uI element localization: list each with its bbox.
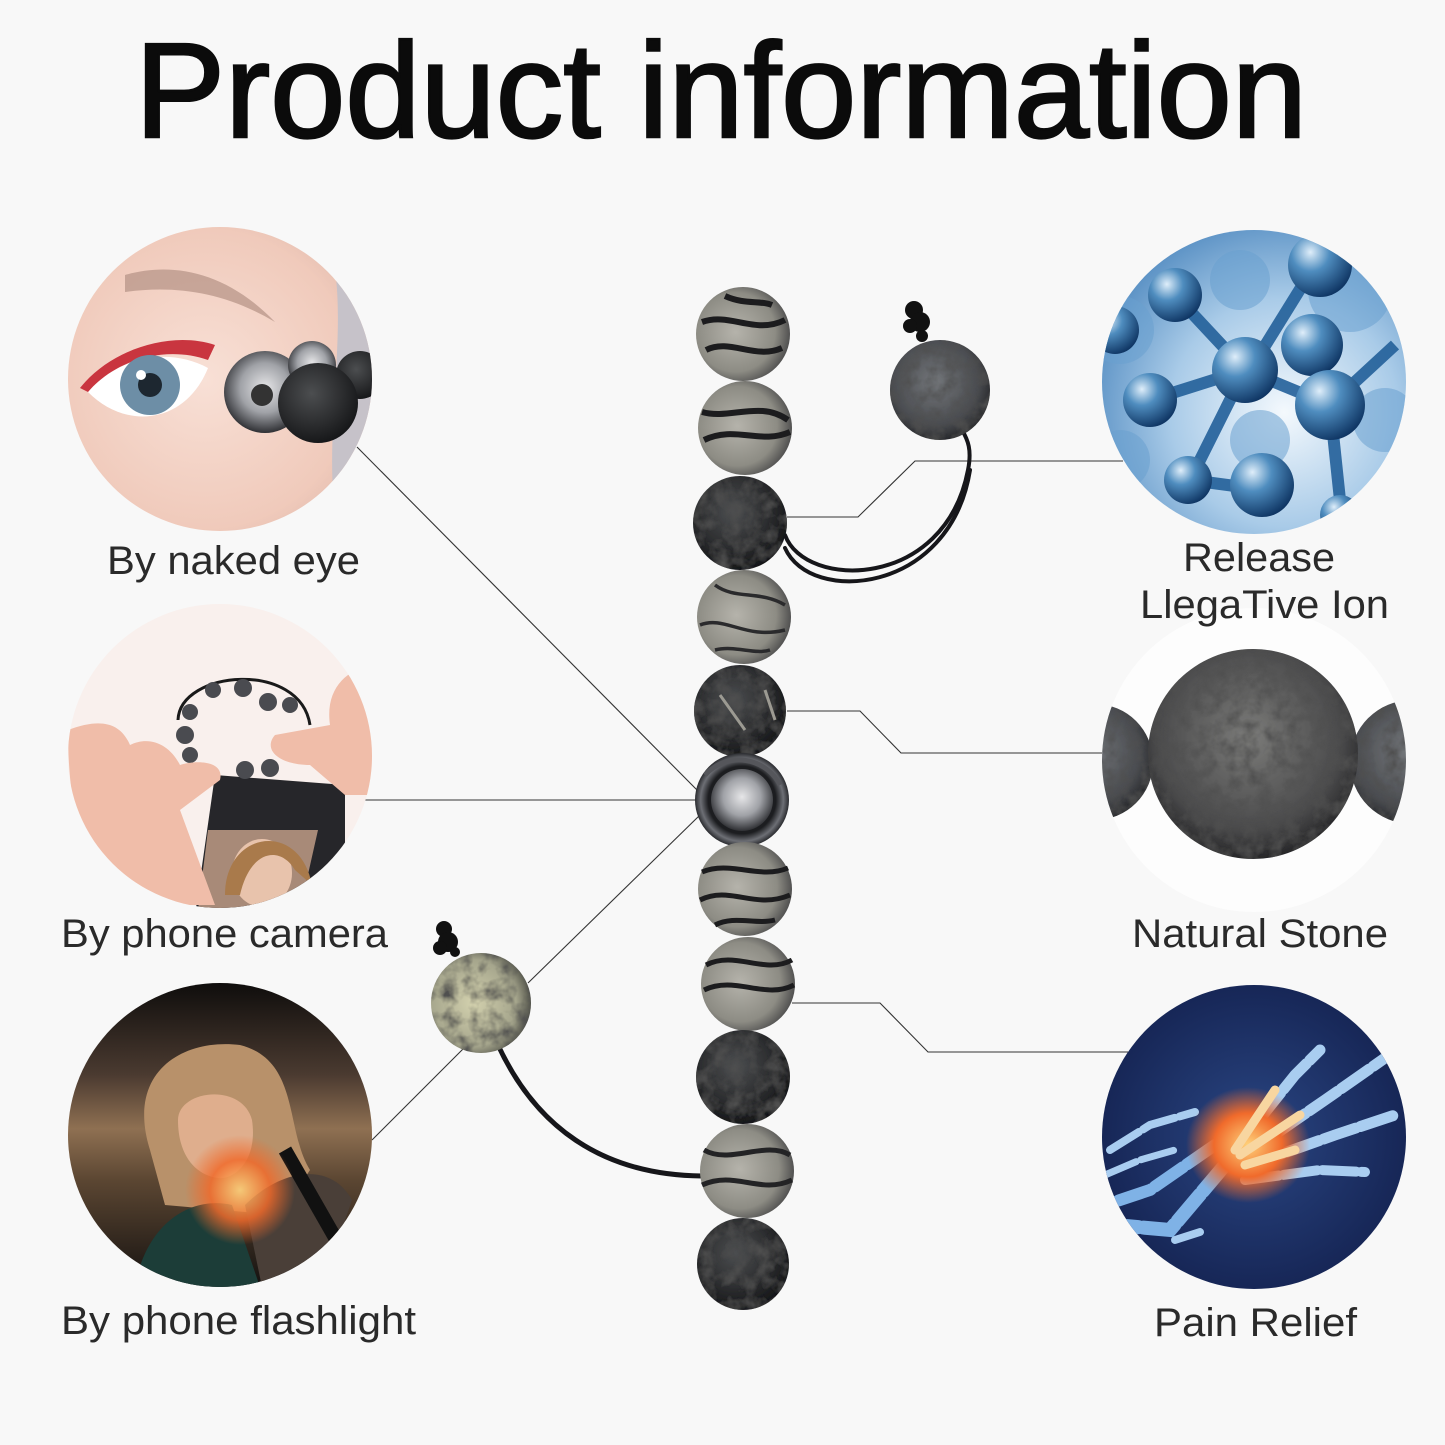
photo: by phone camera: [68, 604, 372, 915]
connector lines: [357, 447, 1128, 1140]
photo: molecule: [1086, 230, 1417, 535]
label: release negative ion: Release: [1183, 536, 1335, 580]
photo: by naked eye: [68, 227, 384, 531]
label: by naked eye: By naked eye: [107, 539, 360, 583]
bead: side lower: [431, 953, 531, 1053]
cord: upper: [785, 430, 970, 581]
cord: lower: [498, 1045, 702, 1176]
title: Product information: [135, 15, 1307, 166]
knot: lower: [433, 921, 460, 957]
photo: pain relief: [1102, 985, 1406, 1289]
knot: upper: [903, 301, 930, 342]
label: by phone camera: By phone camera: [61, 912, 389, 956]
photo: by phone flashlight: [68, 983, 372, 1287]
label: natural stone: Natural Stone: [1132, 912, 1388, 956]
label: by phone flashlight: By phone flashlight: [61, 1299, 416, 1343]
bead: side upper: [890, 340, 990, 440]
label: pain relief: Pain Relief: [1154, 1301, 1358, 1345]
bracelet beads: [693, 287, 795, 1310]
label: release negative ion: [1140, 536, 1389, 627]
label: release negative ion: LlegaTive Ion: [1140, 583, 1389, 627]
photo: natural stone: [1102, 649, 1406, 859]
